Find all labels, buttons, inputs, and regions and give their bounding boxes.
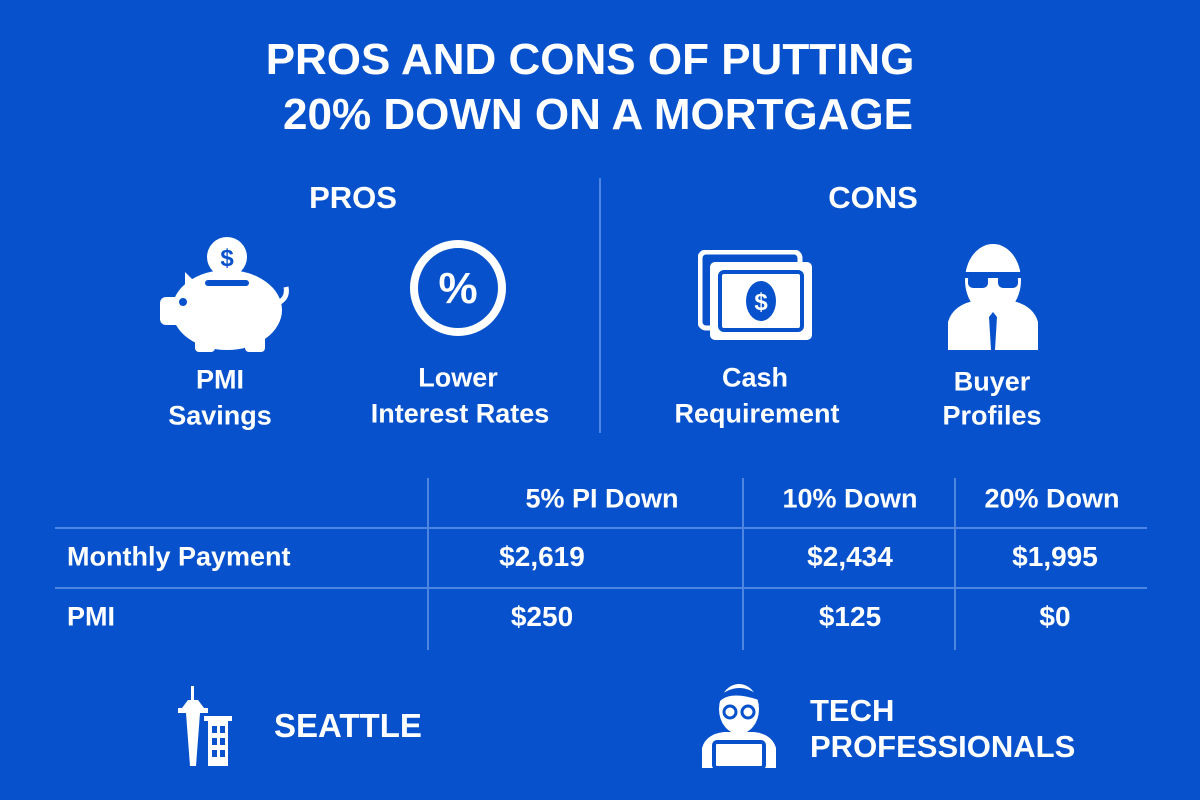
label: PMI Savings: [168, 364, 272, 430]
row: monthly payment: $2,619: [499, 541, 585, 572]
row: monthly payment: $2,434: [807, 541, 893, 572]
heading: cons: CONS: [828, 180, 918, 215]
label: Tech Professionals: PROFESSIONALS: [810, 729, 1075, 764]
row: monthly payment: [67, 541, 1098, 572]
row: PMI: PMI: [67, 602, 115, 632]
title: PROS AND CONS OF PUTTING: [266, 35, 914, 84]
table header: 20% Down: [984, 484, 1120, 514]
table header: [525, 484, 1120, 514]
label: Lower Interest Rates: [371, 362, 549, 428]
row: PMI: $125: [819, 601, 881, 632]
label: Cash Requirement: [674, 362, 840, 428]
comparison table: [55, 478, 1147, 650]
row: monthly payment: $1,995: [1012, 541, 1098, 572]
label: Cash Requirement: Requirement: [674, 398, 840, 428]
heading: pros: PROS: [309, 180, 397, 215]
label: PMI Savings: PMI: [196, 364, 244, 394]
table header: 10% Down: [782, 484, 918, 514]
icon: piggy bank: [160, 237, 289, 352]
icon: tech professional: [702, 684, 776, 768]
label: Cash Requirement: Cash: [722, 362, 788, 392]
row: PMI: [67, 601, 1071, 632]
title: 20% DOWN ON A MORTGAGE: [283, 90, 913, 139]
icon: buyer: [948, 244, 1038, 350]
table header: 5% PI Down: [525, 484, 679, 514]
label: Buyer Profiles: Buyer: [954, 366, 1030, 396]
label: Seattle: SEATTLE: [274, 707, 422, 744]
title: [266, 35, 914, 139]
label: Tech Professionals: [810, 693, 1075, 764]
icon: space needle: [178, 686, 232, 766]
icon: cash: [698, 250, 812, 340]
row: PMI: $0: [1039, 601, 1071, 632]
label: Tech Professionals: TECH: [810, 693, 894, 728]
row: monthly payment: Monthly Payment: [67, 542, 291, 572]
icon: percent: %: [438, 264, 478, 313]
icon: percent: [410, 240, 506, 336]
label: Buyer Profiles: Profiles: [942, 400, 1042, 430]
label: Lower Interest Rates: Interest Rates: [371, 398, 549, 428]
label: Buyer Profiles: [942, 366, 1042, 430]
label: Lower Interest Rates: Lower: [418, 362, 498, 392]
icon: piggy bank: $: [220, 245, 234, 272]
icon: cash: $: [754, 289, 768, 316]
label: PMI Savings: Savings: [168, 400, 272, 430]
row: PMI: $250: [511, 601, 573, 632]
